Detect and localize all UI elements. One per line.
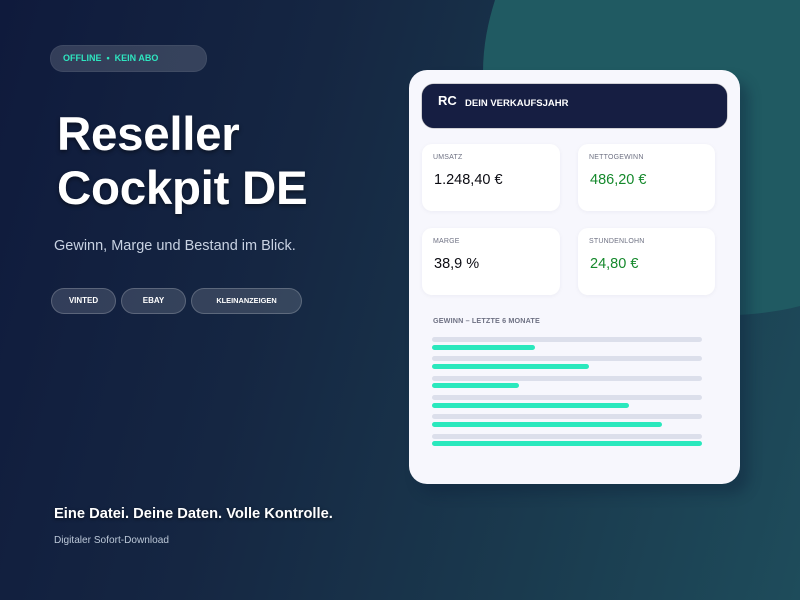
stat: Nettogewinn (578, 144, 715, 211)
bar chart: profit last 6 months (432, 337, 702, 446)
value: 38,9 % (434, 256, 479, 272)
value: 24,80 € (590, 256, 638, 272)
title: Cockpit DE (57, 162, 307, 215)
label: MARGE (433, 238, 460, 245)
stat: Umsatz (422, 144, 560, 211)
value: 1.248,40 € (434, 172, 503, 188)
download note: Digitaler Sofort-Download (54, 535, 169, 546)
chip: Vinted (51, 288, 116, 314)
logo initials: RC (438, 93, 457, 108)
chip: Kleinanzeigen: KLEINANZEIGEN (216, 296, 277, 305)
platform chips (51, 288, 302, 314)
panel: dashboard card (409, 70, 740, 484)
label: NETTOGEWINN (589, 154, 644, 161)
badge: offline, no subscription: OFFLINE • KEIN ABO (63, 53, 158, 63)
stat: Marge (422, 228, 560, 295)
chip: eBay (121, 288, 186, 314)
value: 486,20 € (590, 172, 646, 188)
title (57, 108, 307, 217)
chip: eBay: EBAY (143, 296, 164, 305)
label: STUNDENLOHN (589, 238, 644, 245)
chip: Kleinanzeigen (191, 288, 302, 314)
chip: Vinted: VINTED (69, 296, 98, 305)
title: Reseller (57, 108, 239, 161)
tagline: Eine Datei. Deine Daten. Volle Kontrolle. (54, 506, 333, 522)
stat: Stundenlohn (578, 228, 715, 295)
label: UMSATZ (433, 154, 462, 161)
badge: offline, no subscription (50, 45, 207, 72)
panel header (422, 84, 727, 128)
header title: DEIN VERKAUFSJAHR (465, 98, 568, 109)
subtitle: Gewinn, Marge und Bestand im Blick. (54, 238, 296, 254)
chart heading: GEWINN – LETZTE 6 MONATE (433, 316, 540, 325)
